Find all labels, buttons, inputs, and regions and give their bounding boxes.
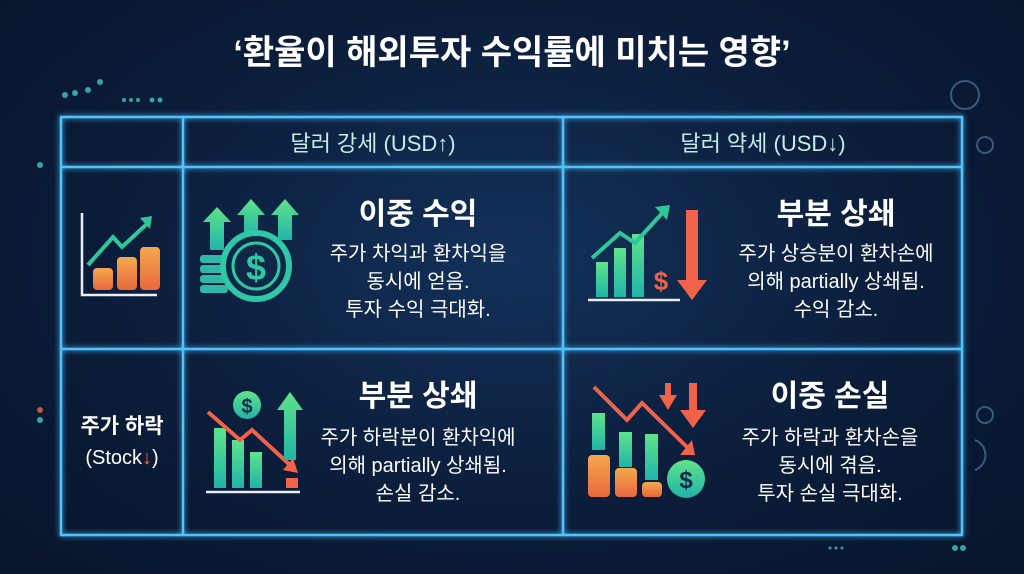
row label: stock down: 주가 하락 xyxy=(80,415,164,438)
cell: double loss: 주가 하락과 환차손을 xyxy=(742,426,918,449)
cell: double profit: 이중 수익 xyxy=(359,198,477,231)
icon: bars up with down arrow: $ xyxy=(654,266,669,296)
decorative corner elements xyxy=(37,79,966,551)
icon: bars down with dollar up: $ xyxy=(241,396,253,418)
icon: bars down with coins and dollar xyxy=(588,383,706,498)
title: ‘환율이 해외투자 수익률에 미치는 영향’ xyxy=(233,34,791,72)
cell: partial offset (bottom-left): 주가 하락분이 환차익에 xyxy=(320,426,516,449)
cell: partial offset (bottom-left): 의해 partially 상쇄됨. xyxy=(329,454,507,477)
cell: partial offset (top-right): 의해 partially 상쇄됨. xyxy=(747,270,925,293)
cell: double profit: 주가 차익과 환차익을 xyxy=(330,242,506,265)
cell: double profit: 동시에 얻음. xyxy=(366,270,470,293)
icon: bars down with dollar up xyxy=(206,391,303,492)
cell: double profit xyxy=(200,198,506,321)
row label: stock down xyxy=(80,415,164,469)
header: dollar strong: 달러 강세 (USD↑) xyxy=(290,131,456,156)
icon: dollar with arrows: $ xyxy=(246,247,266,288)
row label icon: stock up xyxy=(82,213,160,295)
cell: partial offset (top-right): 수익 감소. xyxy=(794,298,878,321)
cell: partial offset (top-right) xyxy=(588,198,934,321)
cell: partial offset (bottom-left): 손실 감소. xyxy=(376,482,460,505)
icon: dollar with arrows xyxy=(200,199,299,299)
cell: double loss: 이중 손실 xyxy=(771,380,889,413)
icon: bars down with coins and dollar: $ xyxy=(679,467,693,494)
row label: stock down: (Stock↓) xyxy=(85,447,159,469)
table grid xyxy=(61,117,962,535)
cell: double loss: 동시에 겪음. xyxy=(778,454,882,477)
cell: double loss: 투자 손실 극대화. xyxy=(757,482,903,505)
cell: double profit: 투자 수익 극대화. xyxy=(345,298,491,321)
cell: partial offset (bottom-left) xyxy=(206,380,516,505)
cell: partial offset (top-right): 주가 상승분이 환차손에 xyxy=(738,242,934,265)
cell: double loss xyxy=(588,380,918,505)
cell: partial offset (bottom-left): 부분 상쇄 xyxy=(359,380,477,413)
header: dollar weak: 달러 약세 (USD↓) xyxy=(680,131,846,156)
cell: partial offset (top-right): 부분 상쇄 xyxy=(777,198,895,231)
icon: bars up with down arrow xyxy=(588,205,707,300)
